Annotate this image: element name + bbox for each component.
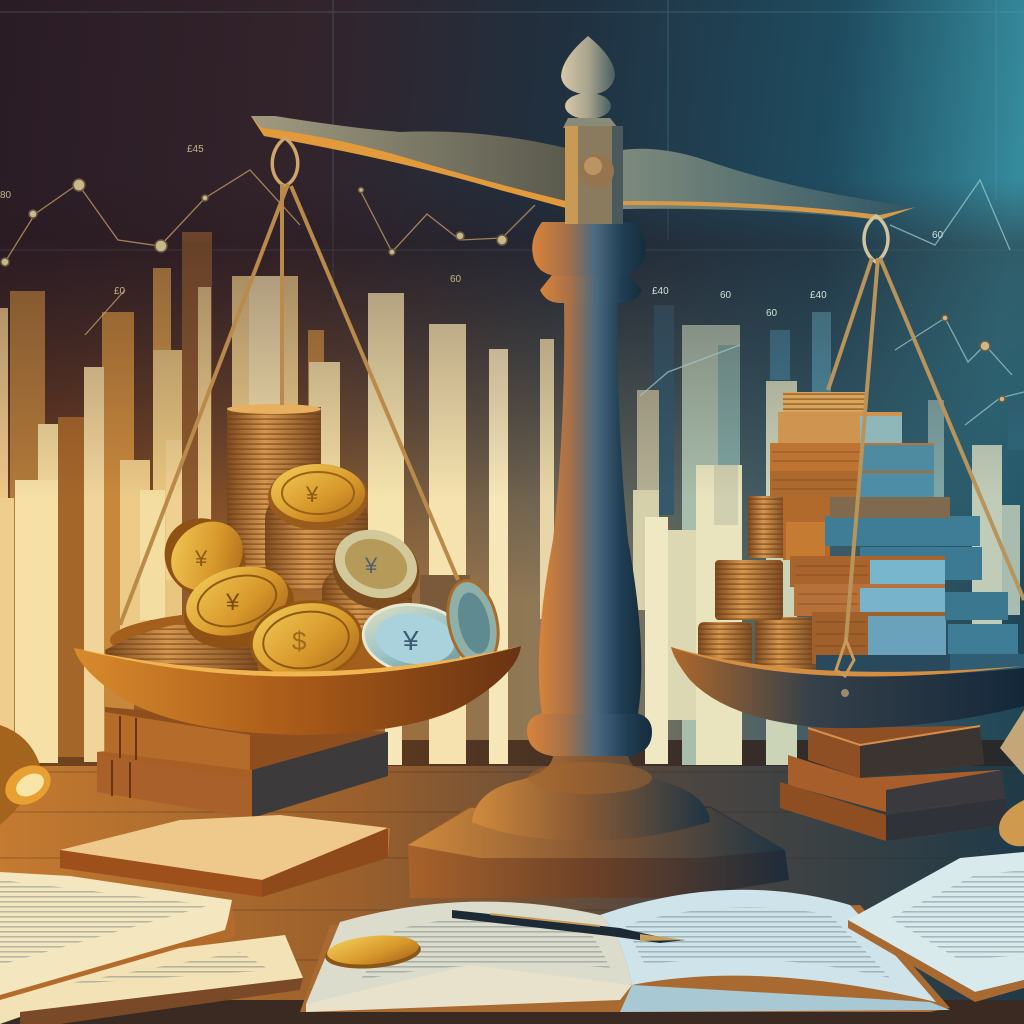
finial [561, 36, 618, 128]
column base [408, 712, 789, 898]
coin stack center: ¥ [305, 482, 319, 507]
coin upper left: ¥ [194, 546, 208, 571]
open book center with pen [300, 890, 950, 1012]
chart labels: £45 [187, 144, 204, 155]
right hook and ropes [828, 216, 1024, 676]
chart labels: 60 [766, 308, 778, 319]
chart labels: £40 [652, 286, 669, 297]
right bars [633, 305, 1024, 765]
closed book on table [60, 815, 390, 897]
left bars [0, 232, 554, 765]
scale column [251, 36, 916, 898]
line chart left [5, 170, 535, 335]
coin silver large: ¥ [402, 625, 419, 656]
coin stack center [265, 464, 368, 590]
coin mid left [175, 556, 303, 660]
chart labels [0, 144, 944, 319]
small coin stacks [698, 496, 815, 673]
pen [452, 910, 685, 943]
table [0, 740, 1024, 1024]
background [0, 0, 1024, 740]
chart labels: £40 [810, 290, 827, 301]
coin bottom gold: $ [292, 626, 307, 656]
coin upper left [148, 502, 262, 614]
coin mid left: ¥ [225, 589, 240, 616]
open book lower left [0, 872, 303, 1024]
left pan with coins [74, 404, 521, 735]
beam [251, 116, 916, 224]
line chart right [640, 180, 1024, 425]
orange object left edge [0, 725, 58, 825]
orange object right edge [999, 710, 1024, 846]
coin bottom gold [246, 595, 366, 685]
column collar [532, 222, 646, 303]
bar chart backdrop [0, 144, 1024, 765]
coin silver large [359, 598, 471, 680]
right pan dish [671, 647, 1024, 728]
chart labels: 80 [0, 190, 12, 201]
left pan dish [74, 646, 521, 735]
gold coin on book [324, 932, 422, 972]
left hook and ropes [120, 138, 458, 625]
coin column [227, 404, 321, 567]
coin pile [105, 570, 490, 680]
chart markers [1, 179, 1005, 402]
books under right pan [780, 726, 1006, 841]
coin silver center [322, 519, 430, 621]
right pan with books [671, 216, 1024, 728]
coin silver center: ¥ [364, 553, 378, 578]
open book right [848, 852, 1024, 1002]
chart labels: 60 [450, 274, 462, 285]
chart labels: 60 [720, 290, 732, 301]
books under left pan [97, 707, 388, 818]
column shaft [539, 300, 641, 714]
chart labels: 60 [932, 230, 944, 241]
chart labels: £0 [114, 286, 126, 297]
book stack [770, 392, 1024, 678]
coin edge right [441, 576, 505, 670]
